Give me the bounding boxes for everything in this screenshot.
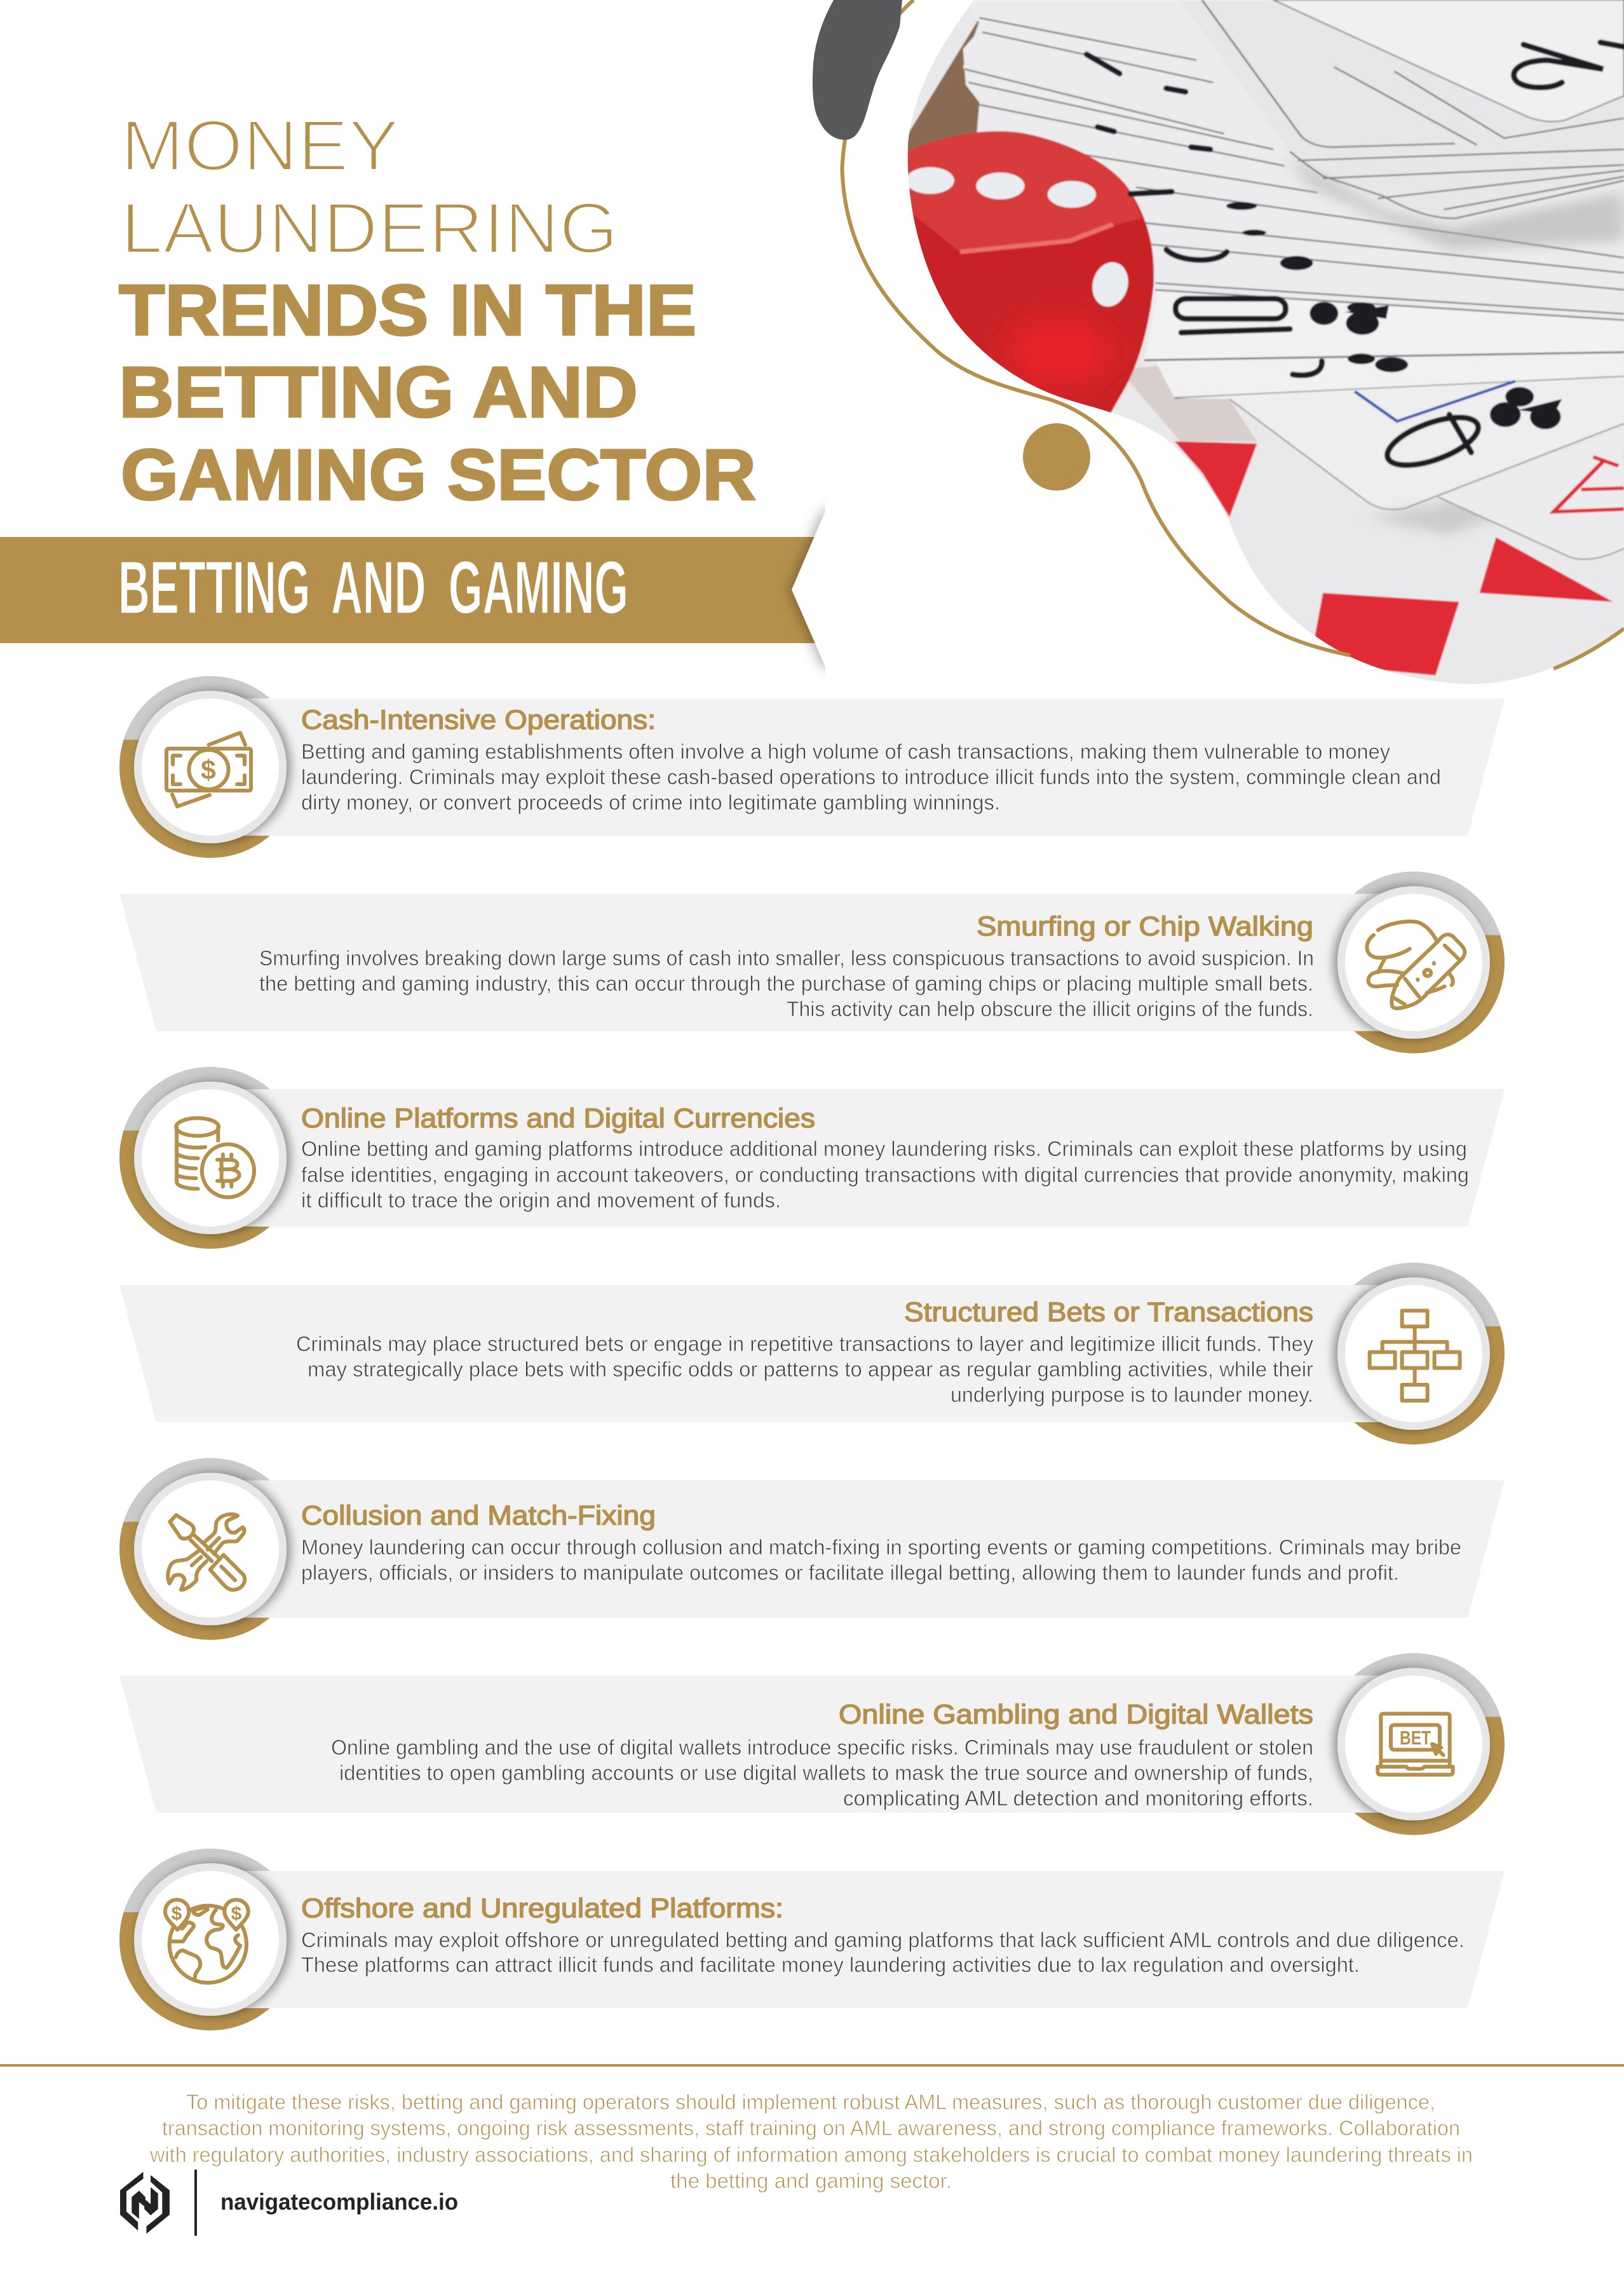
panel: online gambling and digital wallets bbox=[119, 1653, 1505, 1835]
die bbox=[912, 132, 1155, 413]
card marks bbox=[1086, 43, 1624, 475]
panel: cash-intensive operations bbox=[119, 676, 1505, 858]
heading: Online Gambling and Digital Wallets bbox=[839, 1699, 1313, 1730]
body text: complicating AML detection and monitoring efforts. bbox=[843, 1786, 1313, 1810]
footer text: with regulatory authorities, industry associations, and sharing of information among stakeholders is crucial to combat money laundering threats in bbox=[149, 2143, 1473, 2166]
body text: may strategically place bets with specific odds or patterns to appear as regular gambling activities, while their bbox=[308, 1357, 1313, 1381]
body text: Online gambling and the use of digital wallets introduce specific risks. Criminals may use fraudulent or stolen bbox=[331, 1736, 1313, 1759]
title bbox=[119, 105, 756, 515]
curved gold line bbox=[842, 0, 1624, 669]
body text bbox=[301, 740, 1441, 814]
footer text: the betting and gaming sector. bbox=[670, 2169, 952, 2192]
panel: online gambling and digital wallets: BET bbox=[1400, 1727, 1431, 1749]
gold dot bbox=[1023, 423, 1090, 491]
icon: organisation chart bbox=[1370, 1310, 1460, 1401]
panel: structured bets or transactions bbox=[119, 1263, 1505, 1444]
body text: Criminals may exploit offshore or unregulated betting and gaming platforms that lack sufficient AML controls and due diligence. bbox=[301, 1928, 1465, 1952]
heading: Online Platforms and Digital Currencies bbox=[301, 1103, 815, 1134]
body text: This activity can help obscure the illicit origins of the funds. bbox=[787, 997, 1313, 1021]
heading: Collusion and Match-Fixing bbox=[301, 1500, 656, 1531]
title: TRENDS IN THE bbox=[119, 270, 696, 350]
body text: players, officials, or insiders to manipulate outcomes or facilitate illegal betting, allowing them to launder funds and profit. bbox=[301, 1561, 1399, 1584]
body text: Smurfing involves breaking down large sums of cash into smaller, less conspicuous transactions to avoid suspicion. In bbox=[259, 946, 1314, 970]
panel: smurfing or chip walking bbox=[119, 871, 1505, 1054]
panel: offshore and unregulated platforms: $ bbox=[231, 1903, 242, 1924]
photo: playing cards and red die bbox=[872, 0, 1624, 699]
body text: Online betting and gaming platforms introduce additional money laundering risks. Criminals can exploit these platforms by using bbox=[301, 1137, 1467, 1160]
heading: Offshore and Unregulated Platforms: bbox=[301, 1893, 783, 1924]
body text bbox=[301, 1137, 1469, 1212]
body text bbox=[259, 946, 1314, 1021]
heading: Cash-Intensive Operations: bbox=[301, 705, 656, 735]
logo mark bbox=[120, 2172, 170, 2234]
body text: dirty money, or convert proceeds of crime into legitimate gambling winnings. bbox=[301, 791, 1000, 814]
red pips bbox=[1175, 441, 1613, 676]
body text: underlying purpose is to launder money. bbox=[951, 1383, 1313, 1406]
logo bbox=[120, 2170, 458, 2236]
body text: the betting and gaming industry, this can occur through the purchase of gaming chips or placing multiple small bets. bbox=[259, 972, 1313, 995]
grey blob bbox=[813, 0, 902, 140]
body text bbox=[301, 1535, 1461, 1584]
icon: laptop with bet button bbox=[1377, 1714, 1453, 1775]
panel: cash-intensive operations: $ bbox=[201, 755, 216, 785]
panel: collusion and match-fixing bbox=[119, 1458, 1505, 1640]
footer rule bbox=[0, 2064, 1624, 2067]
logo wordmark: navigatecompliance.io bbox=[220, 2189, 458, 2215]
body text: identities to open gambling accounts or use digital wallets to mask the true source and ownership of funds, bbox=[339, 1761, 1313, 1784]
icon: coins with bitcoin bbox=[176, 1118, 254, 1197]
title: LAUNDERING bbox=[121, 188, 618, 268]
body text: Betting and gaming establishments often involve a high volume of cash transactions, making them vulnerable to money bbox=[301, 740, 1390, 763]
footer text: To mitigate these risks, betting and gaming operators should implement robust AML measures, such as thorough customer due diligence, bbox=[186, 2090, 1435, 2114]
title: GAMING SECTOR bbox=[121, 435, 756, 515]
icon: banknotes bbox=[166, 733, 251, 806]
heading: Smurfing or Chip Walking bbox=[977, 911, 1313, 942]
body text bbox=[301, 1928, 1465, 1976]
title: BETTING AND bbox=[119, 352, 638, 432]
title: MONEY bbox=[121, 105, 399, 186]
body text bbox=[331, 1736, 1313, 1810]
footer text: transaction monitoring systems, ongoing risk assessments, staff training on AML awareness, and strong compliance frameworks. Collaboration bbox=[162, 2116, 1460, 2140]
panel: online platforms and digital currencies bbox=[119, 1067, 1505, 1249]
body text: it difficult to trace the origin and movement of funds. bbox=[301, 1188, 781, 1212]
icon: globe with pins bbox=[165, 1900, 248, 1983]
body text: false identities, engaging in account takeovers, or conducting transactions with digital currencies that provide anonymity, making bbox=[301, 1163, 1469, 1186]
panel: offshore and unregulated platforms: $ bbox=[172, 1903, 182, 1924]
body text: Criminals may place structured bets or engage in repetitive transactions to layer and legitimize illicit funds. They bbox=[296, 1332, 1313, 1356]
panel: offshore and unregulated platforms bbox=[119, 1849, 1505, 2030]
body text: laundering. Criminals may exploit these cash-based operations to introduce illicit funds into the system, commingle clean and bbox=[301, 765, 1441, 789]
body text: Money laundering can occur through collusion and match-fixing in sporting events or gaming competitions. Criminals may bribe bbox=[301, 1535, 1461, 1559]
body text: These platforms can attract illicit funds and facilitate money laundering activities due to lax regulation and oversight. bbox=[301, 1953, 1360, 1976]
icon: hand with pen bbox=[1367, 921, 1465, 1009]
ribbon banner bbox=[0, 496, 902, 686]
footer text bbox=[149, 2090, 1473, 2192]
banner text: BETTING AND GAMING bbox=[118, 546, 628, 630]
heading: Structured Bets or Transactions bbox=[904, 1297, 1313, 1328]
logo divider bbox=[194, 2170, 197, 2236]
body text bbox=[296, 1332, 1313, 1406]
icon: crossed tools bbox=[168, 1514, 245, 1590]
